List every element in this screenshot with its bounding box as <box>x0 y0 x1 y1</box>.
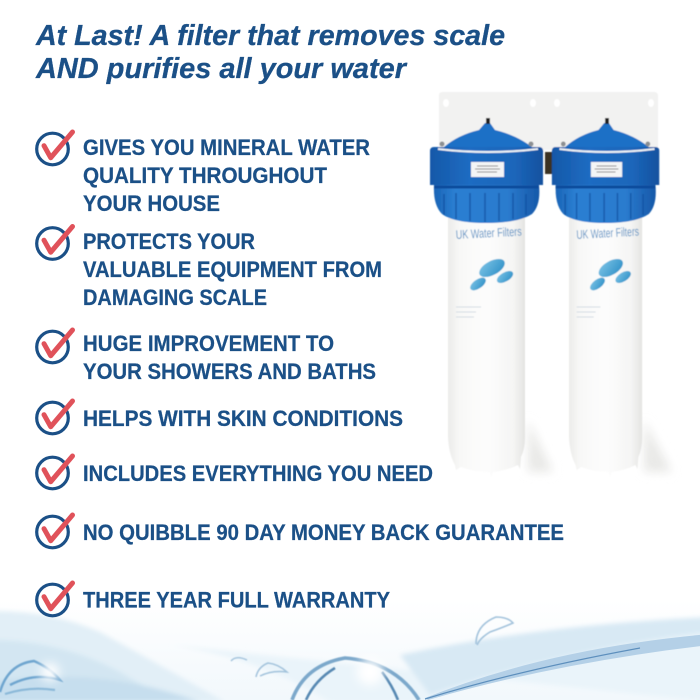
feature: protects equipment <box>37 226 382 310</box>
left filter <box>430 118 543 478</box>
title <box>35 20 505 85</box>
feature: showers and baths: HUGE IMPROVEMENT TO <box>83 331 334 356</box>
feature: protects equipment: DAMAGING SCALE <box>83 285 267 310</box>
title: AND purifies all your water <box>35 53 408 85</box>
right filter <box>552 118 659 478</box>
feature: showers and baths <box>37 330 376 384</box>
feature: skin conditions: HELPS WITH SKIN CONDITIONS <box>83 406 403 431</box>
feature: money back guarantee <box>37 515 564 548</box>
title: At Last! A filter that removes scale <box>35 20 505 52</box>
feature: warranty: THREE YEAR FULL WARRANTY <box>83 588 390 612</box>
icon: check mark <box>37 226 72 259</box>
feature: showers and baths: YOUR SHOWERS AND BATHS <box>83 359 376 384</box>
feature: skin conditions <box>37 401 403 434</box>
icon: check mark <box>37 456 72 489</box>
feature: includes everything: INCLUDES EVERYTHING YOU NEED <box>83 461 433 486</box>
mounting bracket <box>439 92 658 150</box>
feature: includes everything <box>37 456 433 489</box>
water droplets <box>0 617 513 700</box>
connector <box>545 152 553 174</box>
product image: twin water filters <box>430 92 672 478</box>
feature: mineral water: YOUR HOUSE <box>83 191 220 216</box>
water wave footer <box>0 600 700 700</box>
icon: check mark <box>37 132 72 165</box>
icon: check mark <box>37 401 72 434</box>
feature: protects equipment: PROTECTS YOUR <box>83 229 255 254</box>
feature: mineral water: GIVES YOU MINERAL WATER <box>83 135 370 160</box>
icon: check mark <box>37 583 72 616</box>
floor shadow <box>528 420 672 472</box>
feature: warranty <box>37 583 390 616</box>
feature: mineral water <box>37 132 370 216</box>
feature: mineral water: QUALITY THROUGHOUT <box>83 163 328 188</box>
feature: money back guarantee: NO QUIBBLE 90 DAY MONEY BACK GUARANTEE <box>83 520 564 545</box>
icon: check mark <box>37 330 72 363</box>
feature: protects equipment: VALUABLE EQUIPMENT FROM <box>83 257 382 282</box>
icon: check mark <box>37 515 72 548</box>
